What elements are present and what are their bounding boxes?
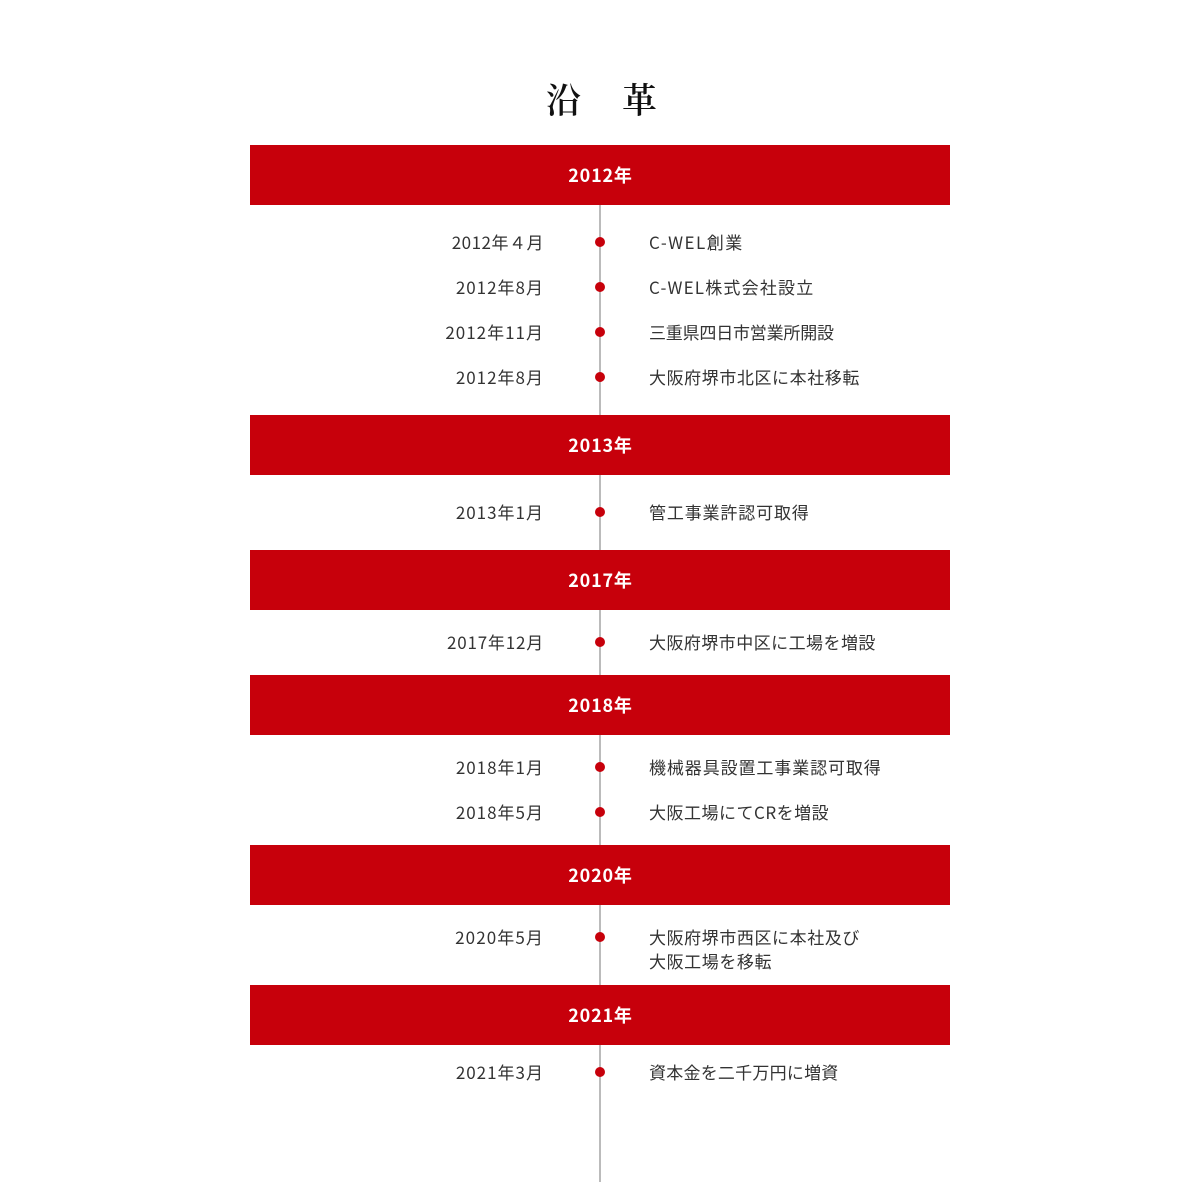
event: 2012 August: C-WEL株式会社設立 [649,274,814,299]
event: 2018 January: 機械器具設置工事業認可取得 [649,754,882,779]
event: 2018 May [456,799,829,824]
event: 2017 December: 2017年12月 [447,629,544,654]
year band: 2017 [250,550,950,610]
event: 2018 May: 大阪工場にてCRを増設 [649,799,829,824]
year band: 2017: 2017年 [568,567,633,593]
year band: 2013: 2013年 [568,432,633,458]
event: 2018 January [456,754,882,779]
event: 2012 August relocation [456,364,860,389]
event: 2012 August relocation: 2012年8月 [456,364,544,389]
event: 2012 November [445,319,834,344]
event: 2018 January: 2018年1月 [456,754,544,779]
event: 2012 November: 2012年11月 [445,319,544,344]
event: 2021 March: 2021年3月 [456,1059,544,1084]
event: 2012 April: C-WEL創業 [649,229,744,254]
event: 2020 May: 2020年5月 [455,924,544,949]
event: 2012 April: 2012年４月 [452,229,544,254]
year band: 2012: 2012年 [568,162,633,188]
event: 2021 March [456,1059,839,1084]
event: 2017 December: 大阪府堺市中区に工場を増設 [649,629,876,654]
event: 2012 August: 2012年8月 [456,274,544,299]
event: 2012 November: 三重県四日市営業所開設 [649,319,834,344]
event: 2013 January: 管工事業許認可取得 [649,499,810,524]
year band: 2021: 2021年 [568,1002,633,1028]
year band: 2013 [250,415,950,475]
year band: 2020 [250,845,950,905]
year band: 2012 [250,145,950,205]
timeline vertical line [599,145,601,1182]
event: 2013 January [456,499,810,524]
year band: 2020: 2020年 [568,862,633,888]
year band: 2018 [250,675,950,735]
year band: 2018: 2018年 [568,692,633,718]
event: 2021 March: 資本金を二千万円に増資 [649,1059,839,1084]
event: 2013 January: 2013年1月 [456,499,544,524]
event: 2012 April [452,229,744,254]
event: 2012 August relocation: 大阪府堺市北区に本社移転 [649,364,860,389]
text: 大阪工場を移転 [649,948,772,973]
year band: 2021 [250,985,950,1045]
event: 2020 May [455,924,860,973]
title: 沿 革 [546,74,660,124]
event: 2017 December [447,629,876,654]
event: 2018 May: 2018年5月 [456,799,544,824]
event: 2020 May: 大阪府堺市西区に本社及び [649,924,860,949]
event: 2012 August [456,274,814,299]
